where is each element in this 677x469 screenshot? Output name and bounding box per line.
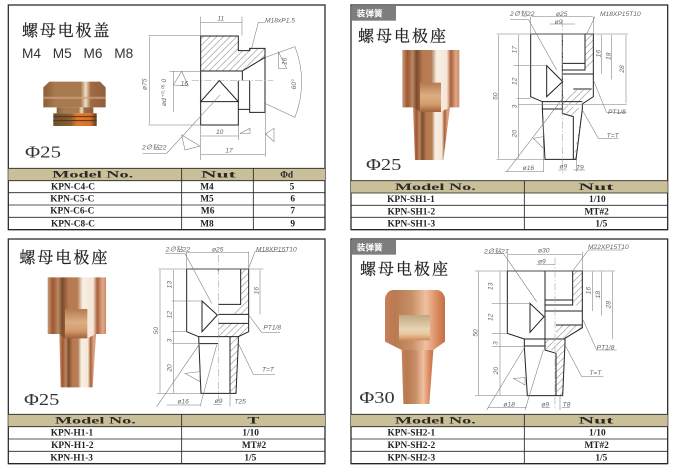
technical drawing: PT1/8 bbox=[263, 325, 281, 332]
title: 螺母电极盖 bbox=[22, 21, 109, 40]
technical drawing: 13 bbox=[167, 281, 174, 288]
table: cap models: M8 bbox=[200, 219, 214, 229]
technical drawing: 3 bbox=[167, 338, 174, 342]
table: seat models bbox=[351, 414, 668, 464]
technical drawing: ø18 bbox=[503, 401, 515, 408]
table: seat models: Model No. bbox=[55, 417, 136, 427]
technical drawing bbox=[492, 10, 641, 173]
table: seat models bbox=[351, 181, 668, 230]
badge: 装弹簧 bbox=[357, 8, 383, 20]
table: seat models: 1/5 bbox=[595, 220, 608, 230]
technical drawing: 16 bbox=[253, 287, 260, 294]
technical drawing: ø9 bbox=[541, 401, 549, 408]
table: seat models: MT#2 bbox=[584, 441, 609, 451]
technical drawing: ø16 bbox=[523, 165, 534, 172]
table: cap models bbox=[8, 168, 325, 230]
product photo: seat bbox=[48, 277, 106, 387]
product photo: seat bbox=[402, 50, 459, 160]
table: cap models: 6 bbox=[290, 194, 295, 204]
technical drawing: T9 bbox=[576, 164, 584, 171]
table: seat models: KPN-H1-2 bbox=[51, 441, 94, 451]
table: seat models: 1/10 bbox=[589, 429, 606, 439]
table: seat models: KPN-H1-1 bbox=[51, 429, 94, 439]
technical drawing: 18 bbox=[595, 291, 602, 298]
title: 螺母电极座 bbox=[358, 26, 446, 45]
table: seat models: Model No. bbox=[395, 183, 476, 193]
technical drawing: 17 bbox=[512, 46, 519, 53]
technical drawing: 10 bbox=[216, 129, 224, 136]
diameter label: Φ25 bbox=[25, 143, 61, 162]
table: seat models: 1/5 bbox=[595, 453, 608, 463]
technical drawing: 20 bbox=[493, 367, 500, 375]
technical drawing: 50 bbox=[472, 329, 479, 337]
technical drawing: 2∅钻22 bbox=[141, 144, 167, 152]
technical drawing: 2∅钻22 bbox=[509, 10, 535, 18]
technical drawing: ø25 bbox=[212, 247, 224, 254]
technical drawing: ø9 bbox=[215, 398, 223, 405]
table: seat models: KPN-SH1-3 bbox=[387, 220, 435, 230]
technical drawing: 50 bbox=[492, 92, 499, 100]
technical drawing: 28 bbox=[606, 301, 613, 309]
technical drawing bbox=[153, 246, 297, 407]
panel: spring-loaded seat 30 bbox=[351, 239, 668, 464]
technical drawing: 16 bbox=[586, 287, 593, 294]
table: seat models: Model No. bbox=[395, 417, 476, 427]
table: seat models: Nut bbox=[578, 183, 616, 193]
technical drawing: 3 bbox=[492, 341, 499, 345]
technical drawing: 16 bbox=[282, 57, 289, 65]
technical drawing: ø25 bbox=[556, 11, 568, 18]
technical drawing: 20 bbox=[512, 130, 519, 138]
technical drawing: 18 bbox=[606, 52, 613, 60]
table: cap models: KPN-C8-C bbox=[51, 219, 95, 229]
table: seat models: KPN-SH2-3 bbox=[387, 453, 435, 463]
table: seat models: 1/5 bbox=[244, 453, 257, 463]
table: cap models: KPN-C6-C bbox=[50, 207, 95, 217]
table: seat models: KPN-SH2-2 bbox=[387, 441, 435, 451]
technical drawing: 12 bbox=[488, 313, 495, 321]
technical drawing: 3 bbox=[512, 104, 519, 108]
technical drawing: M18xP1.5 bbox=[265, 17, 295, 24]
table: cap models: M6 bbox=[201, 207, 215, 217]
sizes label: M4 M5 M6 M8 bbox=[22, 46, 133, 61]
technical drawing: T25 bbox=[234, 399, 246, 406]
table: cap models: 9 bbox=[290, 219, 295, 229]
technical drawing: 50 bbox=[153, 327, 160, 334]
technical drawing: 16 bbox=[596, 50, 603, 57]
table: seat models: 1/10 bbox=[242, 429, 259, 439]
technical drawing: ød⁺⁰·⁰⁵ 0 bbox=[161, 79, 168, 106]
technical drawing: ø30 bbox=[538, 247, 550, 254]
table: cap models: Nut bbox=[201, 171, 238, 181]
technical drawing: 20 bbox=[167, 364, 174, 373]
table: cap models: 7 bbox=[290, 207, 295, 217]
table: cap models: KPN-C4-C bbox=[51, 182, 95, 192]
technical drawing: M18XP15T10 bbox=[600, 11, 641, 18]
title: 螺母电极座 bbox=[360, 259, 448, 278]
technical drawing: 60° bbox=[290, 79, 298, 89]
technical drawing bbox=[141, 16, 302, 160]
table: seat models: KPN-H1-3 bbox=[50, 453, 93, 463]
diameter label: Φ25 bbox=[366, 155, 401, 174]
panel: nut electrode seat H1 bbox=[8, 239, 325, 464]
technical drawing: T=T bbox=[589, 370, 602, 377]
technical drawing: 17 bbox=[225, 148, 233, 155]
table: seat models: MT#2 bbox=[584, 207, 609, 217]
technical drawing: ø9 bbox=[559, 164, 567, 171]
technical drawing: PT1/8 bbox=[597, 345, 615, 352]
technical drawing: 2∅钻27 bbox=[483, 248, 509, 256]
technical drawing: M18XP15T10 bbox=[256, 247, 297, 254]
table: cap models: Model No. bbox=[52, 171, 133, 181]
technical drawing: ø9 bbox=[538, 259, 546, 266]
technical drawing: 28 bbox=[619, 65, 626, 74]
table: seat models: Nut bbox=[578, 417, 616, 427]
table: seat models: KPN-SH1-1 bbox=[387, 195, 435, 205]
technical drawing: ø16 bbox=[177, 399, 189, 406]
technical drawing: 16 bbox=[181, 80, 188, 87]
technical drawing: PT1/8 bbox=[608, 109, 626, 116]
technical drawing: T=T bbox=[607, 132, 620, 139]
technical drawing: T=T bbox=[262, 367, 275, 374]
panel: nut electrode cap bbox=[8, 5, 325, 230]
technical drawing: M22XP15T10 bbox=[588, 244, 629, 251]
table: seat models: 1/10 bbox=[589, 195, 606, 205]
table: cap models: Φd bbox=[280, 171, 294, 181]
table: seat models: KPN-SH2-1 bbox=[387, 429, 435, 439]
table: cap models: M5 bbox=[200, 194, 214, 204]
technical drawing: 11 bbox=[217, 16, 225, 23]
product photo: seat bbox=[385, 290, 445, 404]
panel: spring-loaded seat 25 bbox=[351, 5, 668, 230]
product photo: cap bbox=[43, 82, 106, 126]
table: seat models: KPN-SH1-2 bbox=[387, 207, 435, 217]
badge bbox=[352, 240, 396, 255]
technical drawing: ø9 bbox=[555, 19, 563, 26]
technical drawing: 2∅钻22 bbox=[165, 246, 190, 254]
table: seat models bbox=[8, 414, 325, 464]
technical drawing: ø75 bbox=[142, 78, 149, 90]
diameter label: Φ25 bbox=[24, 390, 59, 409]
table: seat models: T bbox=[247, 417, 261, 427]
diameter label: Φ30 bbox=[359, 388, 395, 407]
technical drawing: 13 bbox=[488, 282, 495, 290]
table: seat models: MT#2 bbox=[242, 441, 267, 451]
technical drawing: T8 bbox=[563, 401, 571, 408]
table: cap models: 5 bbox=[290, 182, 295, 192]
technical drawing bbox=[472, 244, 629, 410]
technical drawing: 12 bbox=[167, 311, 174, 318]
table: cap models: M4 bbox=[200, 182, 214, 192]
table: cap models: KPN-C5-C bbox=[50, 194, 95, 204]
title: 螺母电极座 bbox=[19, 248, 107, 267]
technical drawing: 12 bbox=[512, 77, 519, 85]
badge: 装弹簧 bbox=[357, 242, 383, 254]
badge bbox=[352, 6, 396, 21]
